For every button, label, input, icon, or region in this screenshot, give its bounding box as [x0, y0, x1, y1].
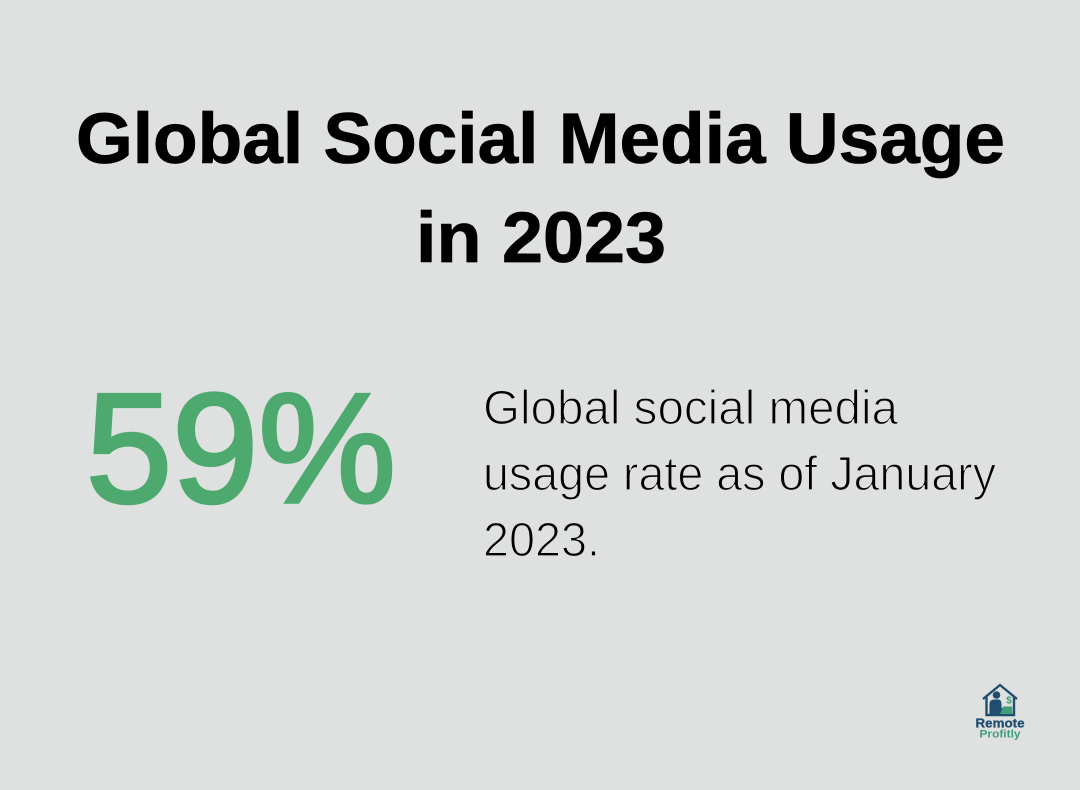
title: Global Social Media Usage	[76, 100, 1005, 179]
description text: 2023.	[483, 514, 600, 567]
statistic: 59%: 59%	[86, 362, 396, 536]
description text: usage rate as of January	[483, 448, 996, 501]
description text	[483, 382, 996, 567]
title	[76, 100, 1005, 278]
description text: Global social media	[483, 382, 898, 435]
title: in 2023	[416, 199, 666, 278]
logo: Remote Profitly	[976, 685, 1025, 740]
logo wordmark: Remote	[976, 716, 1025, 730]
logo wordmark: Profitly	[980, 728, 1021, 740]
icon: house with person and laptop: $	[1006, 696, 1012, 706]
logo wordmark	[976, 716, 1025, 740]
